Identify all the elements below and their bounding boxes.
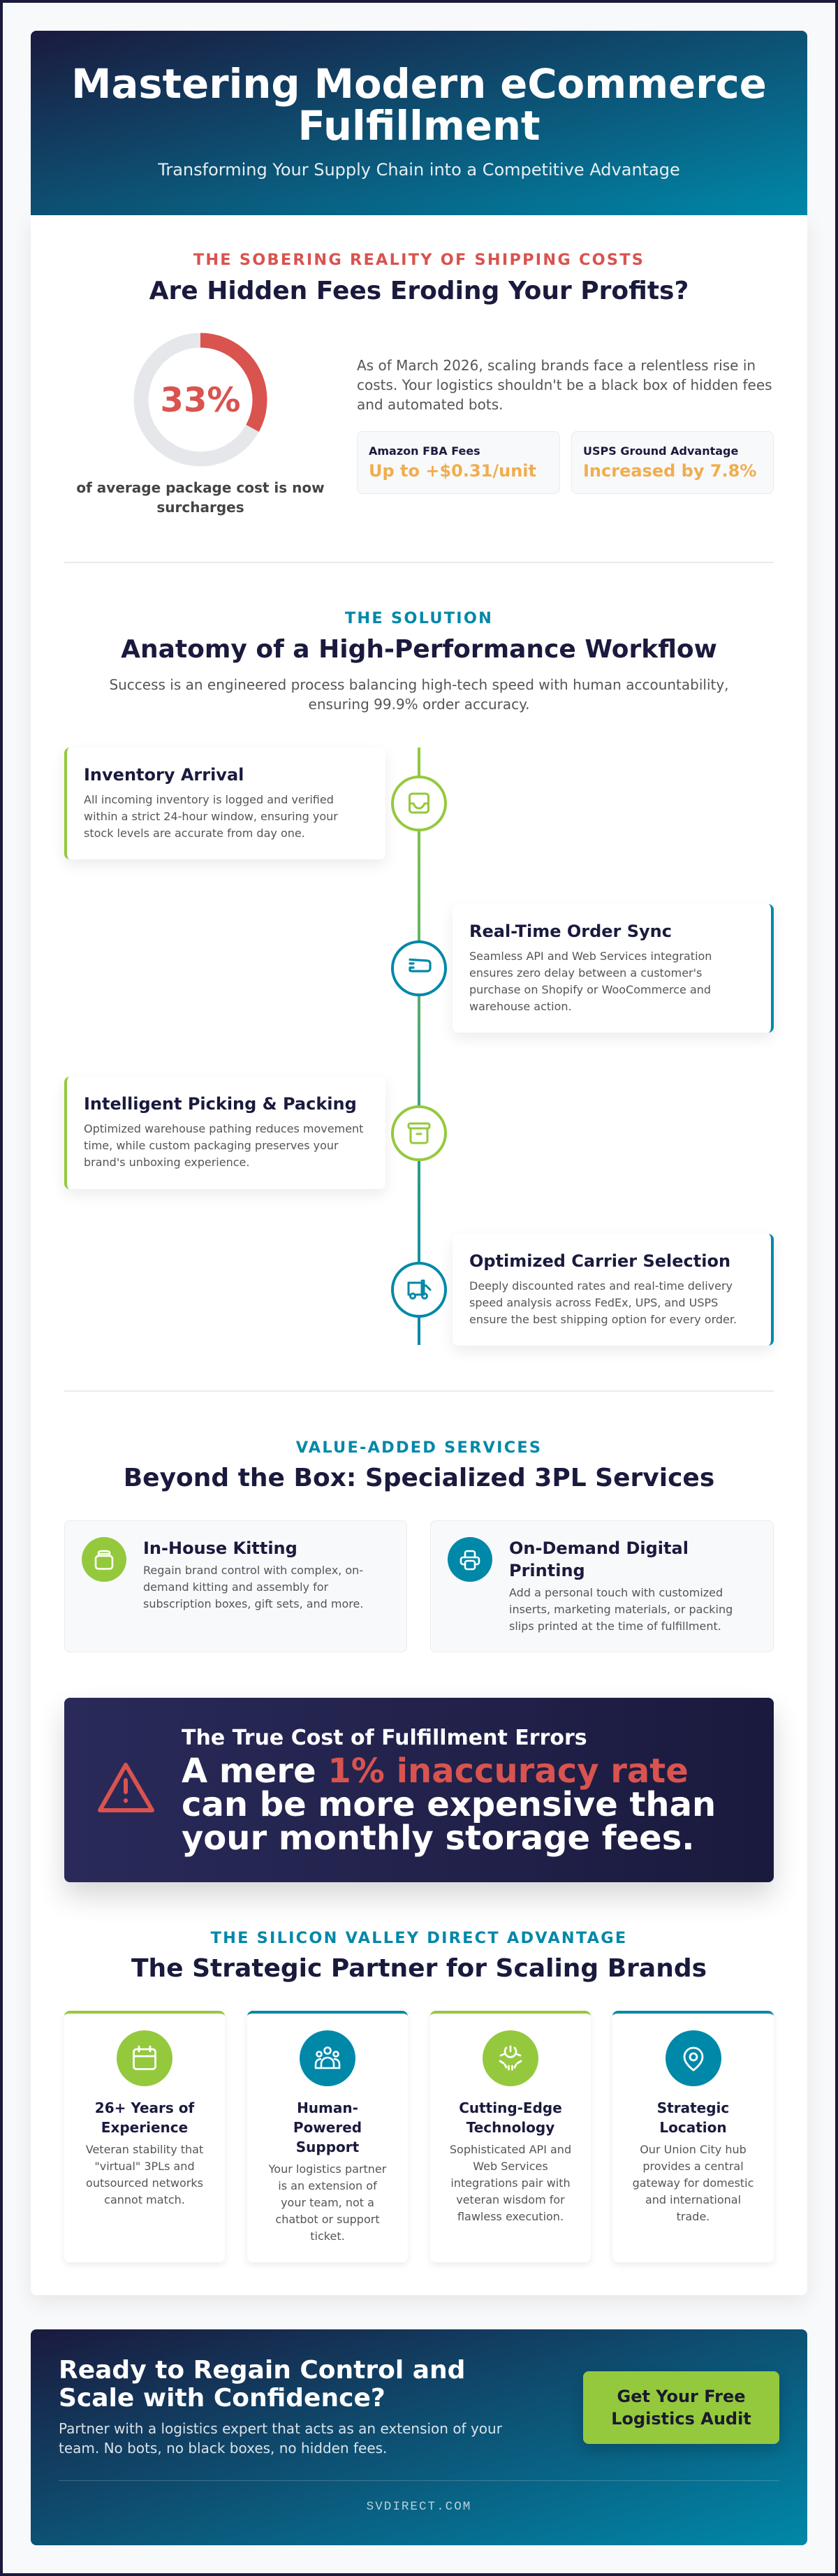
icon: people	[300, 2030, 355, 2086]
step 2: real-time order sync: warehouse action.	[469, 1000, 572, 1013]
panel: shipping costs section	[76, 251, 774, 516]
cta text: Partner with a logistics expert that acts as an extension of your	[59, 2420, 502, 2437]
heading: services: Beyond the Box: Specialized 3PL Services	[124, 1464, 714, 1492]
donut caption: of average package cost is now	[76, 479, 325, 496]
step 1: inventory arrival: stock levels are accurate from day one.	[84, 827, 305, 840]
divider	[64, 1390, 774, 1392]
card: technology: Cutting-Edge	[459, 2100, 562, 2116]
card: on-demand printing	[430, 1520, 774, 1652]
step 2: real-time order sync: purchase on Shopify or WooCommerce and	[469, 983, 711, 996]
stat box: usps	[571, 431, 774, 494]
icon: archive box	[391, 1105, 447, 1161]
heading: hidden fees: Are Hidden Fees Eroding Your Profits?	[149, 277, 689, 305]
panel: main content	[31, 215, 807, 2295]
card: location: Strategic	[657, 2100, 729, 2116]
workflow intro: Success is an engineered process balancing high-tech speed with human accountability,	[109, 676, 729, 693]
card: support: Powered	[293, 2119, 362, 2136]
workflow intro: ensuring 99.9% order accuracy.	[309, 696, 529, 713]
card: support: is an extension of	[278, 2179, 377, 2192]
step 3: intelligent picking: Optimized warehouse pathing reduces movement	[84, 1122, 363, 1135]
card: experience: 26+ Years of	[95, 2100, 194, 2116]
footer rule	[59, 2480, 779, 2481]
cta heading: Scale with Confidence?	[59, 2384, 385, 2413]
step 3: intelligent picking: Intelligent Picking & Packing	[84, 1094, 357, 1114]
step 2: real-time order sync: ensures zero delay between a customer's	[469, 966, 702, 980]
stat box: amazon fees	[357, 431, 560, 494]
card: location	[612, 2011, 774, 2262]
eyebrow: shipping costs: THE SOBERING REALITY OF SHIPPING COSTS	[193, 251, 645, 269]
eyebrow: services: VALUE-ADDED SERVICES	[296, 1439, 542, 1457]
heading: workflow: Anatomy of a High-Performance Workflow	[121, 635, 717, 664]
description text	[357, 357, 772, 413]
card: support: your team, not a	[281, 2196, 374, 2209]
step 3: intelligent picking: brand's unboxing experience.	[84, 1156, 249, 1169]
callout: cost of errors	[64, 1698, 774, 1882]
callout statement: A mere 1% inaccuracy rate	[182, 1752, 689, 1791]
icon: map pin	[666, 2030, 721, 2086]
panel: call to action	[31, 2329, 807, 2545]
donut caption	[76, 479, 325, 516]
stat box: usps: Increased by 7.8%	[583, 461, 756, 481]
timeline line	[418, 748, 420, 1345]
card: on-demand printing: On-Demand Digital	[509, 1538, 689, 1558]
icon: printer	[448, 1537, 492, 1582]
cta button	[583, 2371, 779, 2444]
card: in-house kitting: demand kitting and assembly for	[143, 1580, 328, 1594]
header banner	[31, 31, 807, 215]
icon: ticket	[391, 940, 447, 996]
step 2: real-time order sync: Seamless API and Web Services integration	[469, 949, 712, 963]
cta text	[59, 2420, 502, 2457]
step 1: inventory arrival	[64, 748, 385, 859]
panel: advantage section	[64, 1929, 774, 2265]
card: technology: Sophisticated API and	[450, 2143, 571, 2156]
description text: and automated bots.	[357, 396, 503, 413]
callout small heading: The True Cost of Fulfillment Errors	[182, 1726, 587, 1750]
card: technology	[430, 2011, 591, 2262]
callout statement: your monthly storage fees.	[182, 1819, 695, 1858]
card: experience: cannot match.	[104, 2193, 185, 2206]
donut caption: surcharges	[156, 499, 244, 516]
cta button: Get Your Free	[617, 2387, 746, 2406]
card: technology: veteran wisdom for	[456, 2193, 565, 2206]
icon: truck	[391, 1262, 447, 1318]
icon: jar	[82, 1537, 126, 1582]
card: on-demand printing: slips printed at the time of fulfillment.	[509, 1620, 721, 1633]
icon: inbox	[391, 776, 447, 831]
step 4: carrier selection: speed analysis across FedEx, UPS, and USPS	[469, 1296, 718, 1309]
panel: value-added services section	[64, 1439, 774, 1652]
stat box: amazon fees: Amazon FBA Fees	[369, 444, 480, 458]
card: support: Your logistics partner	[269, 2162, 386, 2176]
card: support	[247, 2011, 408, 2262]
callout statement	[182, 1752, 716, 1858]
card: in-house kitting: Regain brand control with complex, on-	[143, 1564, 363, 1577]
title: Fulfillment	[297, 103, 541, 150]
card: location: Location	[659, 2119, 727, 2136]
step 2: real-time order sync: Real-Time Order Sync	[469, 922, 672, 941]
eyebrow: solution: THE SOLUTION	[345, 609, 493, 627]
description text: As of March 2026, scaling brands face a relentless rise in	[357, 357, 756, 374]
card: support: ticket.	[310, 2229, 345, 2243]
card: experience: outsourced networks	[86, 2176, 203, 2190]
card: support: Human-	[297, 2100, 358, 2116]
cta heading	[59, 2356, 465, 2413]
step 1: inventory arrival: within a strict 24-hour window, ensuring your	[84, 810, 338, 823]
card: location: Our Union City hub	[640, 2143, 747, 2156]
workflow intro	[109, 676, 729, 713]
card: location: provides a central	[642, 2160, 744, 2173]
card: in-house kitting	[64, 1520, 407, 1652]
card: technology: Technology	[466, 2119, 554, 2136]
subtitle: Transforming Your Supply Chain into a Competitive Advantage	[158, 160, 680, 180]
card: on-demand printing: inserts, marketing materials, or packing	[509, 1603, 733, 1616]
card: location: trade.	[677, 2210, 710, 2223]
heading: strategic partner: The Strategic Partner for Scaling Brands	[131, 1954, 707, 1983]
cta heading: Ready to Regain Control and	[59, 2356, 465, 2385]
card: technology: Web Services	[473, 2160, 548, 2173]
card: experience: "virtual" 3PLs and	[94, 2160, 195, 2173]
stat box: usps: USPS Ground Advantage	[583, 444, 738, 458]
step 4: carrier selection: ensure the best shipping option for every order.	[469, 1313, 737, 1326]
step 4: carrier selection: Deeply discounted rates and real-time delivery	[469, 1279, 733, 1293]
card: support: chatbot or support	[275, 2213, 380, 2226]
step 3: intelligent picking: time, while custom packaging preserves your	[84, 1139, 339, 1152]
cta button: Logistics Audit	[611, 2409, 751, 2429]
timeline	[63, 748, 775, 1353]
card: technology: flawless execution.	[457, 2210, 564, 2223]
step 1: inventory arrival: All incoming inventory is logged and verified	[84, 793, 334, 806]
website: SVDIRECT.COM	[367, 2500, 471, 2514]
card: experience	[64, 2011, 225, 2262]
card: experience: Veteran stability that	[86, 2143, 203, 2156]
card: technology: integrations pair with	[450, 2176, 571, 2190]
step 3: intelligent picking	[64, 1077, 385, 1189]
callout statement: can be more expensive than	[182, 1785, 716, 1824]
card: on-demand printing: Add a personal touch with customized	[509, 1586, 723, 1599]
panel: workflow section	[63, 609, 775, 1353]
stat box: amazon fees: Up to +$0.31/unit	[369, 461, 536, 481]
card: location: gateway for domestic	[633, 2176, 754, 2190]
card: support: Support	[296, 2139, 359, 2155]
card: in-house kitting: subscription boxes, gift sets, and more.	[143, 1597, 363, 1610]
donut chart: 33 percent: 33%	[160, 381, 240, 420]
icon: calendar	[117, 2030, 172, 2086]
step 4: carrier selection: Optimized Carrier Selection	[469, 1251, 730, 1271]
card: in-house kitting: In-House Kitting	[143, 1538, 297, 1558]
card: experience: Experience	[101, 2119, 188, 2136]
eyebrow: advantage: THE SILICON VALLEY DIRECT ADVANTAGE	[211, 1929, 627, 1947]
divider	[64, 562, 774, 563]
cta text: team. No bots, no black boxes, no hidden fees.	[59, 2440, 387, 2457]
step 1: inventory arrival: Inventory Arrival	[84, 765, 244, 785]
step 4: carrier selection	[453, 1234, 774, 1346]
icon: warning triangle	[98, 1763, 154, 1812]
title	[71, 61, 767, 150]
icon: technology burst	[483, 2030, 538, 2086]
description text: costs. Your logistics shouldn't be a black box of hidden fees	[357, 377, 772, 393]
card: on-demand printing: Printing	[509, 1561, 585, 1580]
title: Mastering Modern eCommerce	[71, 61, 767, 108]
donut chart: 33 percent	[134, 333, 267, 467]
step 2: real-time order sync	[453, 904, 774, 1033]
card: location: and international	[645, 2193, 741, 2206]
